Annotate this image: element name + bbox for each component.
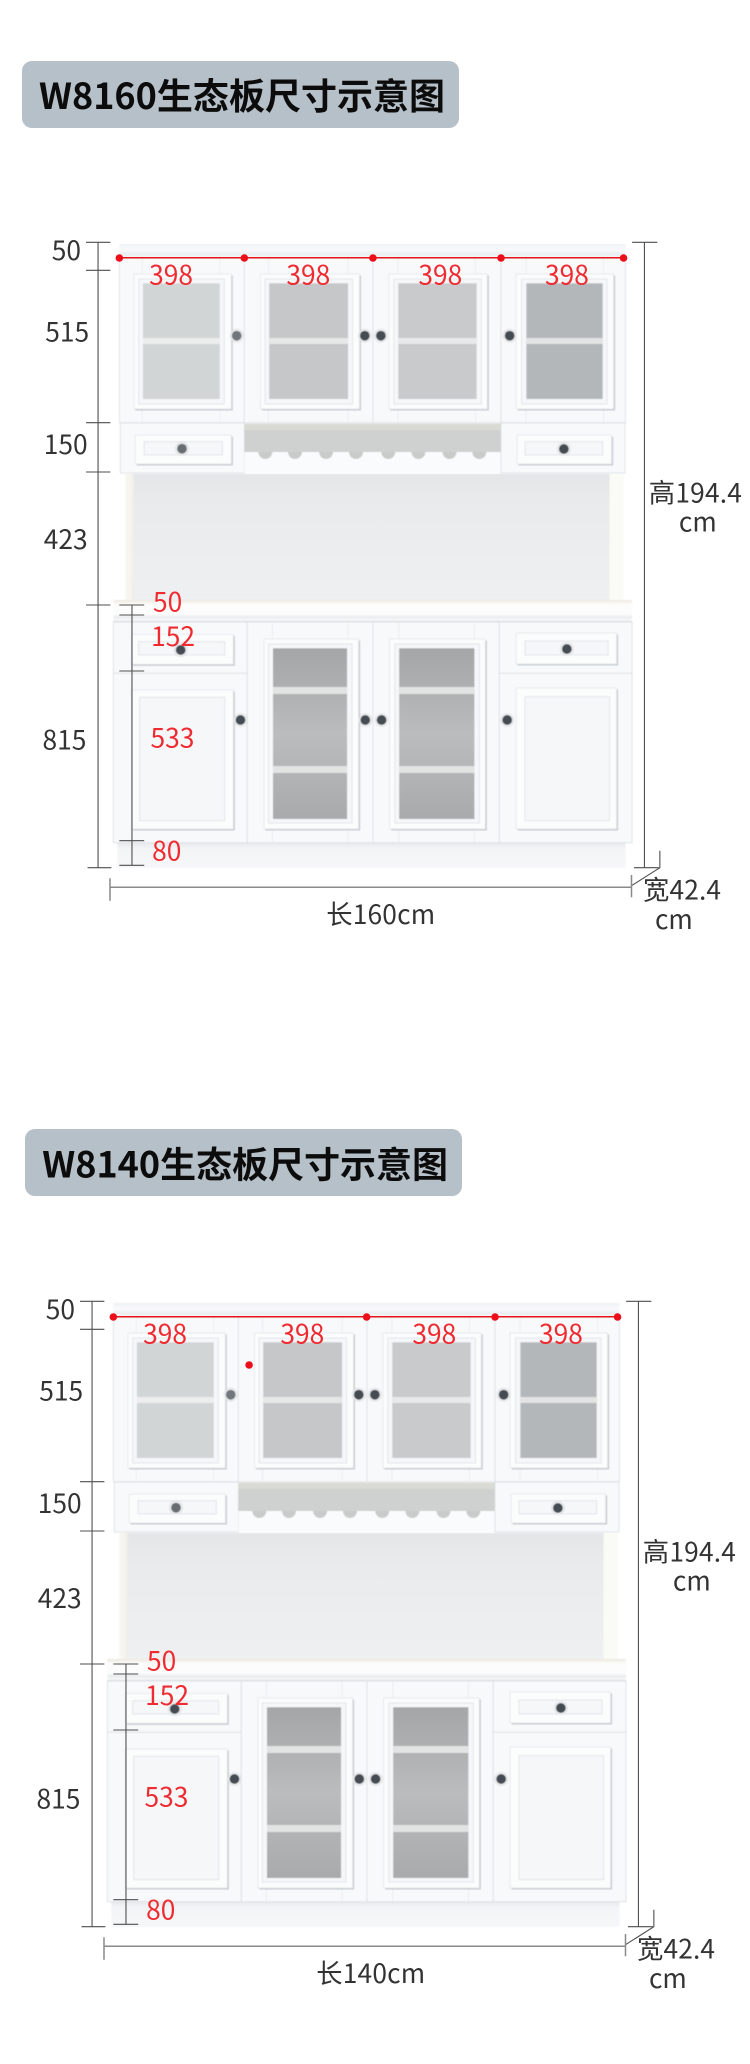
red dimension labels: 80 (152, 830, 181, 869)
cabinet illustration (113, 244, 632, 868)
lower right panel door (510, 1747, 612, 1890)
open shelf (119, 1532, 618, 1659)
lower left panel door (125, 1749, 229, 1890)
depth dimension line (626, 1910, 654, 1945)
black dimension labels: cm (655, 898, 693, 937)
red dimension labels (143, 1312, 583, 1928)
red dimension labels: 398 (418, 253, 462, 292)
upper glass door 3 (389, 274, 489, 410)
red dimension labels: 152 (145, 1674, 189, 1713)
red dimension labels: 398 (149, 253, 193, 292)
black dimension labels: 宽42.4 (643, 868, 721, 907)
countertop (107, 1659, 626, 1681)
black dimension labels: 815 (43, 718, 86, 757)
red dimension labels: 152 (151, 615, 195, 654)
black dimension labels: 50 (52, 229, 81, 268)
lower cabinet faces (113, 622, 632, 843)
red dimension labels (149, 253, 589, 869)
black dimension labels: cm (649, 1957, 687, 1996)
upper knobs (230, 329, 516, 342)
red dimension labels: 50 (153, 581, 182, 620)
right height dimension line (632, 242, 659, 868)
lower knobs (234, 714, 514, 726)
open shelf (125, 473, 624, 600)
red dimension labels: 50 (147, 1640, 176, 1679)
lower glass door 3 (384, 1698, 481, 1890)
upper right drawer (501, 423, 625, 473)
title: W8140: W8140生态板尺寸示意图 (42, 1137, 448, 1189)
wine rack (238, 1482, 495, 1532)
plinth (111, 1902, 620, 1927)
red width line (116, 254, 627, 262)
black dimension labels: 150 (38, 1482, 82, 1521)
upper left drawer (114, 1482, 238, 1532)
black dimension labels: 423 (38, 1577, 82, 1616)
upper glass door 3 (383, 1333, 483, 1470)
crown moulding (113, 1303, 620, 1317)
black dimension labels: 150 (44, 423, 88, 462)
upper glass door 4 (510, 1333, 609, 1470)
left height dimension lines (86, 242, 111, 868)
upper glass door 1 (128, 1333, 227, 1470)
right height dimension line (626, 1301, 653, 1927)
inner height dimension lines (119, 605, 144, 866)
upper glass door 4 (516, 274, 615, 410)
black dimension labels (43, 229, 742, 937)
cabinet illustration (107, 1303, 626, 1927)
red width line (110, 1313, 621, 1369)
crown moulding (119, 244, 626, 258)
black dimension labels: 515 (45, 311, 89, 350)
upper knobs (224, 1388, 510, 1401)
length dimension line (110, 875, 632, 901)
lower right panel door (516, 688, 618, 830)
upper glass door 1 (134, 274, 233, 410)
upper glass door 2 (261, 274, 361, 410)
lower cabinet faces (107, 1681, 626, 1902)
red dimension labels: 80 (146, 1889, 175, 1928)
red dimension labels: 533 (145, 1776, 188, 1815)
black dimension labels: 长160cm (326, 893, 435, 932)
black dimension labels: 长140cm (316, 1952, 425, 1991)
red dimension labels: 398 (280, 1312, 324, 1351)
black dimension labels: cm (673, 1560, 711, 1599)
diagram: W8160 cabinet with dimensions (43, 229, 742, 937)
upper right drawer (495, 1482, 619, 1532)
lower right drawer (516, 633, 618, 666)
black dimension labels: 高194.4 (649, 472, 742, 511)
lower left drawer (131, 634, 235, 666)
lower left panel door (131, 690, 235, 830)
upper left drawer (120, 423, 244, 473)
red dimension labels: 398 (545, 253, 589, 292)
length dimension line (104, 1934, 626, 1960)
depth dimension line (632, 851, 660, 886)
upper door faces (119, 258, 626, 423)
upper door faces (113, 1317, 620, 1482)
black dimension labels: cm (679, 501, 717, 540)
black dimension labels: 高194.4 (643, 1531, 736, 1570)
black dimension labels: 50 (46, 1288, 75, 1327)
lower left drawer (125, 1693, 229, 1725)
red dimension labels: 398 (286, 253, 330, 292)
black dimension labels: 宽42.4 (637, 1927, 715, 1966)
inner height dimension lines (113, 1664, 138, 1924)
red dimension labels: 533 (151, 717, 194, 756)
black dimension labels: 515 (39, 1370, 83, 1409)
black dimension labels: 423 (44, 518, 88, 557)
wine rack (244, 423, 501, 473)
lower knobs (228, 1772, 508, 1786)
left height dimension lines (80, 1301, 105, 1927)
lower glass door 3 (390, 639, 487, 830)
lower right drawer (510, 1692, 612, 1724)
plinth (117, 843, 626, 868)
countertop (113, 600, 632, 622)
title: W8160: W8160生态板尺寸示意图 (39, 68, 445, 120)
red dimension labels: 398 (143, 1312, 187, 1351)
upper glass door 2 (255, 1333, 355, 1470)
red dimension labels: 398 (412, 1312, 456, 1351)
black dimension labels (37, 1288, 736, 1996)
lower glass door 2 (264, 639, 360, 830)
lower glass door 2 (258, 1698, 354, 1890)
diagram: W8140 cabinet with dimensions (37, 1288, 736, 1996)
black dimension labels: 815 (37, 1777, 80, 1816)
red dimension labels: 398 (539, 1312, 583, 1351)
